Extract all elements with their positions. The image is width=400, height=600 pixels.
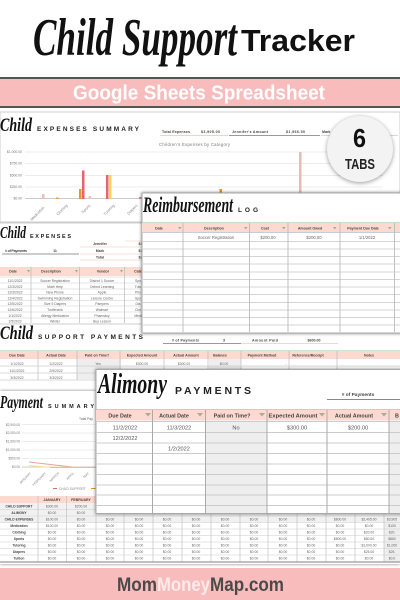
bar chart: expenses by category: $500.00 [10,174,22,178]
monthly summary table: $0.00 [77,550,85,554]
expenses table: 1/5/2022 [8,320,22,324]
heading: alimony payments: # of Payments [342,392,375,398]
expenses table: Pharmacy [94,314,110,318]
bar chart: expenses by category: $1,000.00 [7,150,22,154]
monthly summary table: $200.00 [75,504,87,508]
payments table [0,350,400,380]
monthly summary table: Sports [14,537,24,541]
expenses table: 12/6/2022 [7,308,23,312]
monthly summary table: $0.00 [106,550,114,554]
monthly summary table: $0.00 [365,524,373,528]
payments table: - [285,362,287,366]
footer banner: Money [157,575,210,596]
badge: 6 tabs [327,116,393,182]
alimony table: 12/2/2022 [113,436,137,442]
bar chart: expenses by category [7,142,383,222]
monthly summary table: $0.00 [192,530,200,534]
totals strip: $1,966.50 [286,130,305,134]
payments table: 3/3/2022 [49,376,63,380]
monthly summary table: $0.00 [163,518,171,522]
monthly summary table: $2,405.00 [361,518,377,522]
monthly summary table: Medication [10,524,28,528]
expenses table: 12/4/2022 [7,296,23,300]
monthly summary table: $0.00 [307,550,315,554]
heading: payment summary: SUMMARY [48,404,94,410]
payments summary [2,241,144,260]
panel: reimbursement log [142,192,400,333]
line chart: payments per month: $2,500.00 [6,423,20,427]
heading: child support payments [0,323,144,344]
bar chart: expenses by category: $250.00 [10,185,22,189]
monthly summary table: $0.00 [279,530,287,534]
monthly summary table: $1,000 [387,544,397,548]
monthly summary table: $25.00 [364,550,374,554]
reimbursement table: $200.00 [260,235,276,240]
payments table: 1/1/2022 [10,362,24,366]
totals strip: Mark [322,130,330,134]
alimony table: 1/2/2022 [168,446,190,452]
heading: payment summary: Payment [0,392,44,412]
payment totals: # of Payments [172,338,199,342]
monthly summary table: $25. [389,550,395,554]
footer banner: Mom [117,575,157,596]
monthly summary table: $0.00 [365,556,373,560]
heading: child expenses: Child [0,223,26,242]
heading: alimony payments [97,368,400,400]
expenses table [0,267,150,324]
monthly summary table: $800.00 [334,518,346,522]
monthly summary table: Tutoring [12,544,26,548]
heading: child expenses summary [0,115,140,136]
heading: child expenses: EXPENSES [30,234,71,240]
alimony table: $300.00 [287,426,307,432]
monthly summary table: $0.00 [192,524,200,528]
monthly summary table: Diapers [13,550,25,554]
footer banner: Map.com [210,575,284,596]
panel: child expenses summary [0,112,400,222]
heading: child expenses summary: EXPENSES SUMMARY [37,126,140,133]
monthly summary table: $0.00 [48,511,56,515]
monthly summary table: $0.00 [163,544,171,548]
monthly summary table: $0.00 [279,556,287,560]
bar chart: expenses by category: $0.00 [14,196,22,200]
expenses table: Cate [134,270,142,274]
bar chart: expenses by category: $750.00 [10,162,22,166]
line chart: payments per month: $500.00 [8,456,20,460]
monthly summary table: $0.00 [221,550,229,554]
payments summary: $3, [138,256,144,260]
monthly summary table: $0.00 [48,556,56,560]
reimbursement table: Date [155,226,163,230]
expenses table: Swimming Registration [38,296,72,300]
expenses table: 11/1/2022 [8,279,23,283]
monthly summary table: $0.00 [135,530,143,534]
line chart: payments per month: CHILD SUPPORT [59,487,86,491]
expenses table: 12/5/2022 [7,302,23,306]
payments table: Actual Amount [173,354,200,358]
expenses table: Walmart [96,308,108,312]
payment totals: 3 [223,338,225,342]
payment totals: Amount Paid [252,338,278,342]
payments table: Actual Date [46,354,66,358]
expenses table: Date [9,270,17,274]
monthly summary table: $0.00 [307,530,315,534]
monthly summary table: $100.00 [46,518,58,522]
monthly summary table: $0.00 [135,518,143,522]
heading: payment summary [0,392,94,421]
reimbursement table: Soccer Registration [198,235,235,240]
expenses table: Description [41,270,61,274]
monthly summary table: ALIMONY [11,511,27,515]
payments table: Paid on Time? [85,354,109,358]
expenses table: Allergy Medication [41,314,69,318]
payments table: Yes [95,362,101,366]
monthly summary table: $0.00 [135,537,143,541]
totals strip: Jennifer's Amount [232,130,269,134]
expenses table: Buy Lesson [93,320,111,324]
monthly summary table: $0.00 [336,550,344,554]
monthly summary table: $60.00 [364,537,374,541]
bar chart: expenses by category: Diapers [126,204,139,216]
monthly summary table: CHILD EXPENSES [5,518,34,522]
monthly summary table: $0.00 [279,518,287,522]
panel: alimony payments [96,368,400,514]
monthly summary table: $0.00 [336,524,344,528]
monthly summary table: $0.00 [307,556,315,560]
monthly summary table: $860 [388,537,396,541]
monthly summary table: $0.00 [250,530,258,534]
bar chart: expenses by category: Clothing [56,204,69,216]
payments summary: $1, [138,242,144,246]
line chart: payments per month [6,423,96,491]
monthly summary table: $0.00 [336,556,344,560]
line chart: payments per month: $0.00 [12,465,20,469]
monthly summary table: $0.00 [221,524,229,528]
expenses table: Spo [135,296,141,300]
monthly summary table: $0.00 [106,530,114,534]
expenses table: Math Help [47,285,63,289]
monthly summary table: $0.0 [389,556,395,560]
monthly summary table: $0.00 [48,537,56,541]
heading: alimony payments: Alimony [97,368,167,400]
monthly summary table: $0.00 [221,530,229,534]
alimony table: $200.00 [348,426,368,432]
alimony table: B [395,414,399,420]
payments table: Notes [364,354,374,358]
monthly summary table: $0.00 [77,518,85,522]
monthly summary table: $0.00 [163,537,171,541]
monthly summary table: $0.00 [279,550,287,554]
payments summary: 11 [53,249,57,253]
expenses table: 12/3/2022 [7,290,23,294]
alimony table: Expected Amount [268,414,318,420]
monthly summary table: $0.00 [106,518,114,522]
monthly summary table: $300.00 [46,504,58,508]
monthly summary table: $0.00 [48,544,56,548]
monthly summary table: $0.00 [192,556,200,560]
reimbursement table: Amount Owed [298,226,322,230]
line chart: payments per month: $1,500.00 [6,440,20,444]
alimony table: No [232,426,240,432]
monthly summary table: $0.00 [163,530,171,534]
bar chart: expenses by category: Medication [30,206,46,222]
monthly summary table: $0.00 [77,556,85,560]
totals strip: $3,905.00 [201,130,220,134]
monthly summary table: $0.00 [250,544,258,548]
monthly summary table: $0.00 [163,556,171,560]
monthly summary table: $0.00 [336,530,344,534]
payments table: $0.00 [220,362,228,366]
monthly summary table: $0.00 [106,537,114,541]
monthly summary table: $0.00 [221,518,229,522]
expenses table: Oxford Learning [90,285,114,289]
expenses table: Medi [134,314,142,318]
heading: reimbursement log: LOG [238,207,258,214]
monthly summary table: $0.00 [279,544,287,548]
expenses table: Spo [135,279,141,283]
monthly summary table: $0.00 [48,530,56,534]
monthly summary table: $0.00 [77,524,85,528]
bar chart: expenses by category: Tutoring [103,204,116,216]
heading: child expenses summary: Child [0,115,32,136]
alimony table: Actual Date [159,414,189,420]
totals strip [160,130,398,136]
heading: reimbursement log: Reimbursement [142,192,234,217]
bar chart: expenses by category: Children's Expenses by Category [159,142,231,147]
monthly summary table: $0.00 [250,518,258,522]
expenses table: Clot [135,308,141,312]
expenses table: Size 5 Diapers [44,302,66,306]
expenses table: 1/1/2022 [8,314,22,318]
monthly summary table: $0.00 [77,511,85,515]
payments table: 1/2/2022 [49,362,63,366]
monthly summary table: CHILD SUPPORT [6,504,32,508]
monthly summary table: $0.00 [221,556,229,560]
expenses table: Apple [98,290,106,294]
monthly summary table: $1,000.00 [361,544,377,548]
expenses table: District 1 Soccer [90,279,115,283]
payments summary: $1, [138,249,144,253]
monthly summary table: $800.00 [334,537,346,541]
alimony table [96,410,400,513]
payments table: 2/9/2022 [49,369,63,373]
line chart: payments per month: MARCH [49,471,61,483]
bar chart: expenses by category: Sports [81,204,92,214]
monthly summary table: $0.00 [279,537,287,541]
payment totals: $600.00 [308,338,320,342]
subtitle banner: Google Sheets Spreadsheet [73,82,325,104]
monthly summary table: $0.00 [307,524,315,528]
payments table: $300.00 [178,362,190,366]
monthly summary table: $0.00 [307,537,315,541]
title: Tracker [241,23,355,58]
monthly summary table: Tuition [14,556,24,560]
panel: child expenses [0,223,150,324]
payments summary: Total [96,256,104,260]
badge: 6 tabs: TABS [345,156,375,173]
monthly summary table: $0.00 [336,544,344,548]
alimony table: 11/3/2022 [167,426,191,432]
heading: child support payments: SUPPORT PAYMENTS [38,334,144,341]
heading: child support payments: Child [0,323,33,344]
expenses table: New Phone [46,290,64,294]
monthly summary table: $0.00 [192,544,200,548]
line chart: payments per month: $1,000.00 [6,448,20,452]
payments table: $300.00 [136,362,148,366]
monthly summary table: $0.00 [192,550,200,554]
expenses table: Soccer Registration [40,279,70,283]
expenses table: Dia [135,302,141,306]
heading: child expenses [0,223,71,242]
expenses table: Pampers [95,302,109,306]
heading: payment summary: Total Pay [79,417,93,421]
alimony table: 11/2/2022 [113,426,137,432]
panel: child support payments [0,323,400,386]
reimbursement table: Description [204,226,224,230]
alimony table: Paid on Time? [214,414,250,420]
subtitle banner [0,77,400,108]
monthly summary table: $20.00 [364,530,374,534]
line chart: payments per month: APRIL [66,471,75,481]
alimony table: Due Date [108,414,132,420]
monthly summary table [0,496,400,562]
monthly summary table: $20. [389,530,395,534]
reimbursement table [142,223,400,332]
reimbursement table: 1/1/2022 [359,235,376,240]
monthly summary table: $0.00 [106,556,114,560]
expenses table: Turtleneck [47,308,63,312]
monthly summary table: $3,905 [387,518,397,522]
monthly summary table: $0.00 [106,544,114,548]
monthly summary table: $0.00 [192,518,200,522]
payments table: 3/3/2022 [10,376,24,380]
payments table: Reference/Receipt [292,354,324,358]
monthly summary table: FEBRUARY [71,498,92,502]
monthly summary table: $0.00 [307,518,315,522]
totals strip: Total Expenses [162,130,190,134]
payments table: Due Date [9,354,25,358]
expenses table: Tuto [135,285,141,289]
monthly summary table: $0.00 [163,550,171,554]
monthly summary table: $0.00 [77,530,85,534]
reimbursement table: Payment Due Date [347,226,379,230]
expenses table: Winter [50,320,61,324]
payments summary: # of Payments [5,249,27,253]
footer banner [0,568,400,600]
heading: alimony payments: PAYMENTS [175,385,251,397]
monthly summary table: $0.00 [307,544,315,548]
badge: 6 tabs: 6 [353,123,366,153]
reimbursement table: $200.00 [306,235,322,240]
payments table: Expected Amount [127,354,158,358]
line chart: payments per month: $2,000.00 [6,431,20,435]
alimony table: Actual Amount [335,414,373,420]
monthly summary table: $0.00 [192,537,200,541]
monthly summary table: $0.00 [250,537,258,541]
line chart: payments per month: JANUARY [18,471,33,485]
payments table: 11/1/2022 [10,369,25,373]
payments summary: Mark [96,249,104,253]
payments table: Payment Method [248,354,276,358]
monthly summary table: $0.00 [77,537,85,541]
payments summary: Jennifer [93,242,108,246]
expenses table: Vendor [97,270,110,274]
payment totals [163,338,338,344]
reimbursement table: Cost [261,226,270,230]
monthly summary table: $0.00 [135,524,143,528]
monthly summary table: Clothing [12,530,26,534]
monthly summary table: $0.00 [221,544,229,548]
monthly summary table: $0.00 [250,524,258,528]
line chart: payments per month: MAY [82,471,91,479]
line chart: payments per month: FEBRUARY [32,471,48,487]
expenses table: Pho [135,290,141,294]
monthly summary table: $0.00 [48,550,56,554]
panel: payment summary [0,391,400,564]
monthly summary table: $0.00 [250,550,258,554]
monthly summary table: JANUARY [43,498,61,502]
monthly summary table: $0.00 [221,537,229,541]
monthly summary table: $0.00 [135,556,143,560]
monthly summary table: $0.00 [163,524,171,528]
monthly summary table: $0.00 [106,524,114,528]
monthly summary table: $0.00 [135,544,143,548]
title: Child Support [33,9,238,67]
expenses table: 12/3/2022 [7,285,23,289]
monthly summary table: $0.00 [77,544,85,548]
monthly summary table: $0.00 [279,524,287,528]
expenses table: Leisure Centre [91,296,113,300]
monthly summary table: $0.00 [250,556,258,560]
monthly summary table: $100.00 [46,524,58,528]
monthly summary table: $100 [388,524,396,528]
payments table: Balance [213,354,227,358]
monthly summary table: $0.00 [135,550,143,554]
